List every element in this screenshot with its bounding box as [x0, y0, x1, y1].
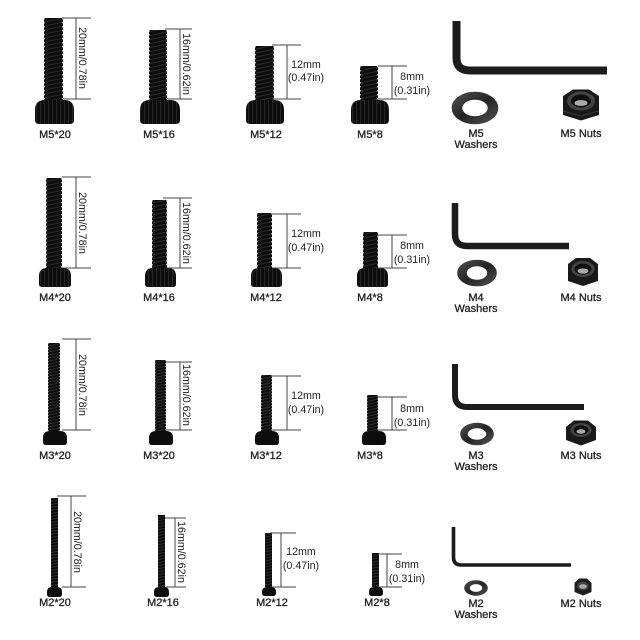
- icon: M3 nut: [566, 420, 596, 446]
- dimension: M5*16: [165, 29, 192, 99]
- icon: M2 hex key: [454, 527, 571, 565]
- screw: M4*12 bolt: [251, 213, 282, 287]
- screw: M2*16 bolt: [154, 515, 169, 597]
- dimension: M2*12: [270, 533, 319, 587]
- dimension: M3*20 second: [166, 362, 192, 430]
- label: M3*12: M3*12: [250, 450, 282, 462]
- dimension: M2*20: 20mm/0.78in: [71, 511, 83, 573]
- label: M5*20: M5*20: [39, 129, 71, 141]
- icon: M2 washer: [464, 580, 488, 596]
- screw: M4*20 bolt: [39, 178, 71, 287]
- dimension: M3*12: 12mm: [291, 390, 321, 402]
- dimension: M4*8: 8mm: [400, 240, 424, 252]
- screw: M3*20 bolt: [43, 343, 67, 445]
- row: M5 hardware: [35, 18, 607, 151]
- label: M2*20: M2*20: [39, 597, 71, 609]
- dimension: M2*8: [378, 554, 425, 587]
- label: M5*8: M5*8: [357, 129, 383, 141]
- screw: M2*8 bolt: [369, 553, 383, 596]
- label: M2 Washers: [454, 598, 498, 621]
- dimension: M2*16: [165, 518, 187, 587]
- dimension: M2*16: 16mm/0.62in: [175, 521, 187, 583]
- label: M5 Washers: Washers: [454, 139, 498, 151]
- label: M3 Washers: [454, 450, 498, 473]
- dimension: M3*20 second: 16mm/0.62in: [180, 364, 192, 426]
- label: M3*20 second: M3*20: [143, 450, 175, 462]
- label: M4*12: M4*12: [250, 292, 282, 304]
- icon: M3 washer: [460, 423, 494, 445]
- dimension: M4*12: [272, 214, 324, 268]
- screw: M5*20 bolt: [35, 18, 74, 124]
- dimension: M2*20: [57, 496, 86, 587]
- dimension: M3*8: [378, 397, 430, 430]
- dimension: M5*12: (0.47in): [288, 72, 324, 84]
- dimension: M2*12: (0.47in): [283, 560, 319, 572]
- screw: M5*8 bolt: [351, 66, 389, 124]
- icon: M5 nut: [563, 90, 599, 120]
- icon: M4 washer: [458, 260, 496, 286]
- label: M4*8: M4*8: [357, 292, 383, 304]
- dimension: M5*8: 8mm: [400, 71, 424, 83]
- icon: M3 hex key: [455, 364, 584, 407]
- label: M5 Washers: [454, 128, 498, 151]
- label: M3*8: M3*8: [357, 450, 383, 462]
- row: M3 hardware: [39, 339, 602, 473]
- dimension: M5*12: [272, 45, 324, 99]
- label: M2 Washers: Washers: [454, 609, 498, 621]
- screw: M3*12 bolt: [255, 375, 279, 445]
- label: M2 Washers: M2: [468, 598, 484, 610]
- label: M5*16: M5*16: [143, 129, 175, 141]
- label: M2*8: M2*8: [364, 597, 390, 609]
- label: M4 Washers: Washers: [454, 303, 498, 315]
- dimension: M5*20: [62, 18, 91, 99]
- label: M3 Washers: M3: [468, 450, 484, 462]
- label: M2*12: M2*12: [256, 597, 288, 609]
- label: M4*20: M4*20: [39, 292, 71, 304]
- label: M2*16: M2*16: [147, 597, 179, 609]
- icon: M2 nut: [574, 578, 592, 596]
- label: M3 Nuts: M3 Nuts: [561, 450, 602, 462]
- dimension: M3*12: [272, 376, 324, 430]
- label: M5 Washers: M5: [468, 128, 484, 140]
- dimension: M3*8: (0.31in): [394, 417, 430, 429]
- dimension: M5*20: 20mm/0.78in: [76, 27, 88, 89]
- dimension: M5*8: [378, 66, 430, 99]
- screw: M2*20 bolt: [47, 498, 62, 597]
- dimension: M4*12: (0.47in): [288, 242, 324, 254]
- dimension: M2*8: (0.31in): [389, 573, 425, 585]
- label: M3*20: M3*20: [39, 450, 71, 462]
- icon: M5 hex key: [456, 21, 607, 70]
- dimension: M4*16: 16mm/0.62in: [180, 202, 192, 264]
- dimension: M4*20: [62, 177, 91, 268]
- dimension: M4*12: 12mm: [291, 228, 321, 240]
- dimension: M4*20: 20mm/0.78in: [76, 192, 88, 254]
- label: M3 Washers: Washers: [454, 461, 498, 473]
- dimension: M2*12: 12mm: [286, 546, 316, 558]
- label: M4 Washers: [454, 292, 498, 315]
- dimension: M3*12: (0.47in): [288, 404, 324, 416]
- dimension: M4*8: [378, 235, 430, 268]
- screw: M4*16 bolt: [145, 200, 176, 287]
- dimension: M4*8: (0.31in): [394, 254, 430, 266]
- screw: M4*8 bolt: [357, 232, 388, 287]
- label: M4 Washers: M4: [468, 292, 484, 304]
- label: M4*16: M4*16: [143, 292, 175, 304]
- dimension: M5*16: 16mm/0.62in: [180, 33, 192, 95]
- screw: M3*8 bolt: [362, 395, 386, 445]
- icon: M5 washer: [452, 92, 498, 124]
- icon: M4 hex key: [455, 203, 569, 246]
- dimension: M3*20: [62, 339, 91, 430]
- row: M2 hardware: [39, 496, 602, 621]
- screw: M5*16 bolt: [140, 30, 180, 124]
- dimension: M3*20: 20mm/0.78in: [76, 354, 88, 416]
- label: M4 Nuts: M4 Nuts: [561, 292, 602, 304]
- dimension: M2*8: 8mm: [395, 559, 419, 571]
- label: M2 Nuts: M2 Nuts: [561, 598, 602, 610]
- dimension: M5*8: (0.31in): [394, 85, 430, 97]
- dimension: M3*8: 8mm: [400, 403, 424, 415]
- screw: M2*12 bolt: [262, 533, 276, 596]
- dimension: M5*12: 12mm: [291, 59, 321, 71]
- row: M4 hardware: [39, 177, 602, 315]
- dimension: M4*16: [163, 198, 192, 268]
- screw: M3*20 second bolt: [149, 360, 173, 445]
- screw: M5*12 bolt: [246, 46, 284, 124]
- icon: M4 nut: [568, 258, 598, 286]
- label: M5*12: M5*12: [250, 129, 282, 141]
- label: M5 Nuts: M5 Nuts: [561, 128, 602, 140]
